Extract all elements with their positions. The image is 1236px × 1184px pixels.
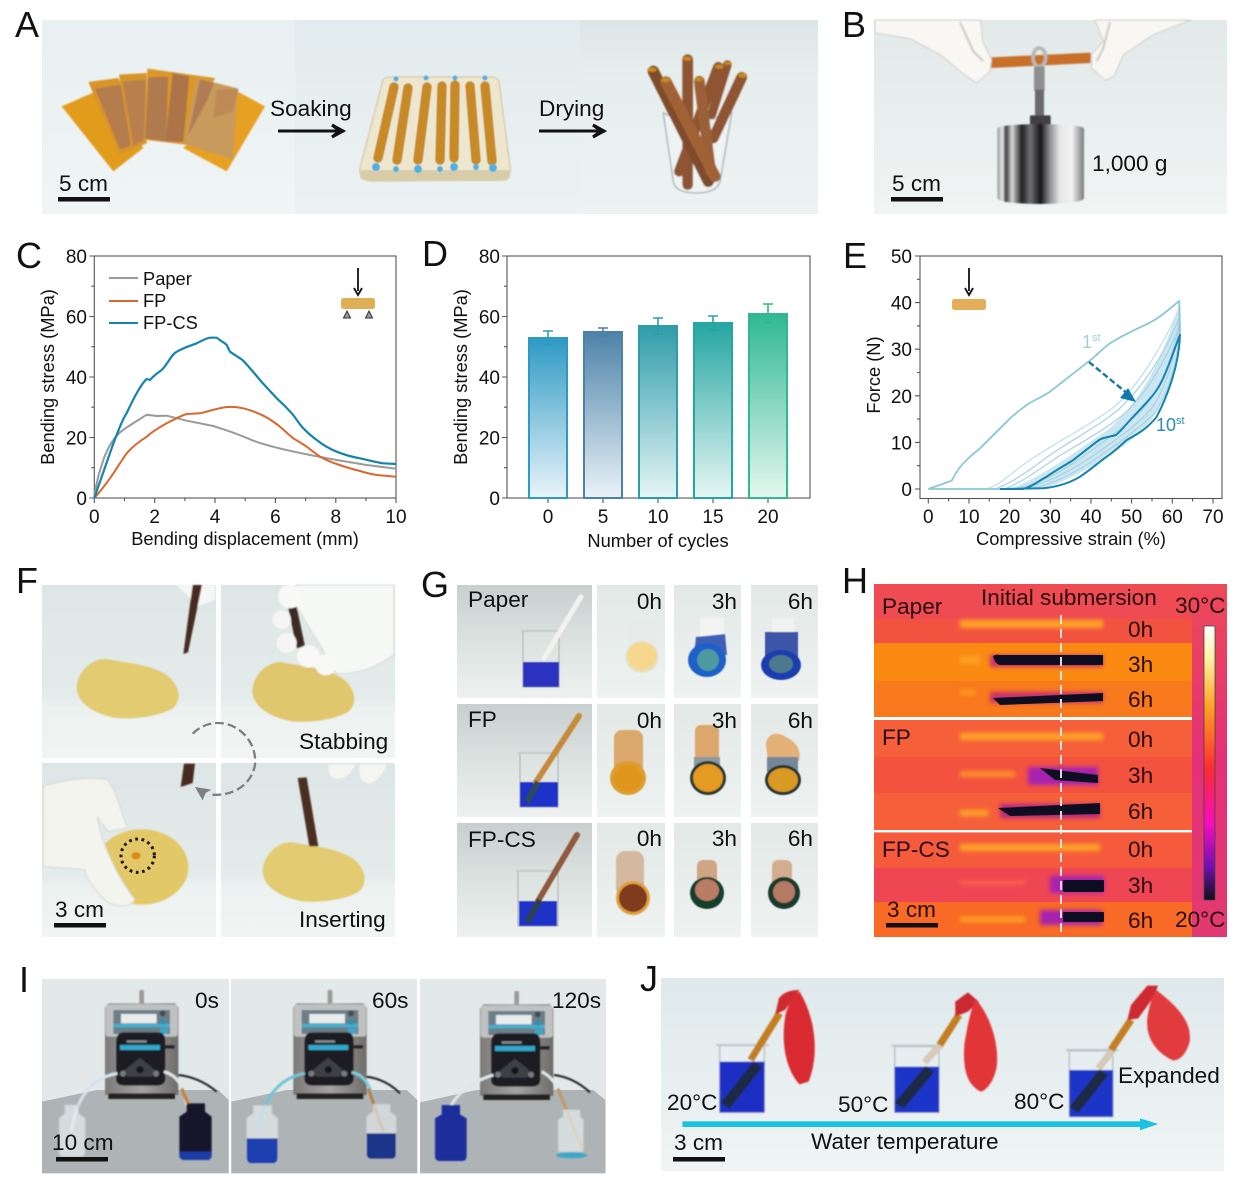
arrow: circular process [193, 723, 255, 800]
panel label E: E [843, 235, 867, 276]
x tick labels C: 6 [270, 507, 281, 528]
row labels G: FP-CS [468, 827, 536, 852]
x tick labels C [89, 507, 407, 528]
time labels G [637, 589, 813, 851]
x tick labels D [543, 507, 779, 528]
axis titles D: Bending stress (MPa) [450, 289, 471, 465]
y tick labels D: 80 [479, 247, 500, 268]
time labels G: 6h [788, 708, 813, 733]
axis titles D [450, 289, 729, 551]
y tick labels E: 40 [891, 294, 912, 315]
time labels H: 3h [1128, 763, 1153, 788]
chart C: bending stress vs displacement [37, 247, 407, 549]
heading: Initial submersion: Initial submersion [981, 585, 1157, 610]
x tick labels D: 5 [598, 507, 608, 528]
photo: soaking tray with tubes [360, 76, 510, 181]
axis titles E [863, 336, 1166, 549]
photo: pump 60s [247, 990, 400, 1163]
scale bar A: 5 cm [59, 171, 108, 196]
curve: cycle 10 [1000, 335, 1180, 489]
annotation: 10st: st [1176, 415, 1185, 427]
bars D [529, 314, 787, 498]
photo: FP-CS cross sections [616, 851, 800, 915]
photo: pump 120s [435, 991, 590, 1161]
y tick labels C: 60 [66, 308, 87, 328]
photo: fan of FP sheets [62, 69, 265, 171]
photo: beaker 50 C with balloon [891, 992, 997, 1112]
panel A: soaking and drying photos [42, 20, 818, 214]
time labels G: 0h [637, 708, 662, 733]
annotation: 10st: 10 [1156, 415, 1176, 435]
panel label C: C [16, 235, 42, 276]
panel H: thermal images [874, 584, 1227, 937]
x tick labels C: 2 [149, 507, 160, 528]
photo: beaker 20 C with balloon [716, 990, 815, 1112]
sample labels H: FP-CS [882, 837, 950, 862]
sample labels H: Paper [882, 594, 943, 619]
x tick labels E: 20 [999, 507, 1020, 528]
panel label H: H [842, 560, 868, 601]
x tick labels E: 50 [1121, 507, 1142, 528]
photo: bottom left potato with hole [43, 764, 195, 906]
x tick labels E: 0 [923, 507, 934, 528]
icon: dotted circle around hole [121, 839, 154, 872]
time labels G: 6h [788, 589, 813, 614]
time labels I: 120s [552, 988, 601, 1013]
x tick labels E [923, 507, 1224, 528]
time labels G: 3h [712, 826, 737, 851]
panel F: potato stabbing photos [42, 584, 395, 937]
chart E: cyclic compression [863, 247, 1224, 549]
photo: Paper in beaker [521, 595, 582, 687]
time labels G: 6h [788, 826, 813, 851]
time labels H: 6h [1128, 799, 1153, 824]
temperature labels: 50°C [838, 1092, 888, 1117]
time labels G: 0h [637, 589, 662, 614]
error bars D [543, 304, 773, 345]
y tick labels E [891, 247, 912, 501]
label: Stabbing: Stabbing [299, 729, 388, 754]
y tick labels D: 20 [479, 428, 500, 450]
intermediate cycles [985, 310, 1180, 489]
dashed line: initial submersion [1060, 615, 1062, 935]
time labels H: 3h [1128, 652, 1153, 677]
y tick labels C: 80 [66, 247, 87, 268]
curve: FP [94, 407, 396, 498]
scale labels: 20°C [1175, 907, 1225, 932]
arrow: cycle trend [1089, 362, 1136, 402]
photo: pump 0s [59, 990, 217, 1160]
panel label B: B [842, 4, 866, 45]
row labels G [468, 587, 536, 852]
scale bar B: 5 cm [892, 171, 941, 196]
dividers [874, 717, 1192, 720]
photo: gloved hands holding tube with weight [875, 20, 1191, 204]
annotation: 1st: 1 [1082, 332, 1092, 352]
legend C: FP-CS [143, 312, 198, 333]
curve: FP-CS [94, 338, 396, 498]
time labels H: 6h [1128, 908, 1153, 933]
y tick labels D: 0 [489, 489, 500, 510]
scale bar I: 10 cm [52, 1130, 114, 1155]
y tick labels D: 60 [479, 308, 500, 328]
scale bar F: 3 cm [55, 897, 104, 922]
y tick labels C: 20 [66, 428, 87, 450]
temperature labels: 80°C [1014, 1089, 1064, 1114]
photo: FP in beaker [518, 716, 579, 807]
label: Inserting: Inserting [299, 907, 386, 932]
label: Expanded: Expanded [1118, 1063, 1220, 1088]
photo: FP-CS in beaker [516, 835, 577, 926]
arrow: drying [539, 125, 604, 137]
x tick labels C: 8 [331, 507, 341, 528]
x tick labels E: 30 [1040, 507, 1061, 528]
scale labels: 30°C [1175, 593, 1225, 618]
color scale bar [1204, 626, 1215, 900]
time labels H: 0h [1128, 727, 1153, 752]
legend C: FP [143, 290, 166, 311]
panel B: 1000 g load photo [874, 20, 1227, 214]
sample labels H [882, 594, 950, 862]
y tick labels E: 10 [891, 433, 912, 454]
axis titles D: Number of cycles [587, 530, 729, 551]
arrow: water temperature [682, 1118, 1158, 1130]
x tick labels D: 15 [702, 507, 724, 528]
x tick labels E: 10 [958, 507, 980, 528]
panel G: dye absorption photos [457, 585, 818, 937]
time labels I: 60s [372, 988, 408, 1013]
y tick labels D [479, 247, 500, 510]
axis titles C: Bending displacement (mm) [131, 528, 359, 549]
y tick labels C: 40 [66, 368, 87, 389]
axis titles E: Compressive strain (%) [976, 528, 1166, 549]
panel J: balloon expansion photos [661, 978, 1224, 1171]
chart D: bending stress vs cycles [450, 247, 810, 551]
legend C [109, 268, 198, 333]
photo: Paper cross sections [626, 618, 801, 680]
y tick labels C: 0 [76, 489, 87, 510]
axis titles C [37, 289, 359, 549]
legend C: Paper [143, 268, 192, 289]
sample labels H: FP [882, 725, 911, 750]
axis titles E: Force (N) [863, 336, 884, 414]
label: 1,000 g: 1,000 g [1092, 151, 1167, 176]
scale labels [1175, 593, 1225, 932]
time labels G: 3h [712, 589, 737, 614]
cloth [42, 1090, 605, 1173]
time labels H: 6h [1128, 687, 1153, 712]
panel label I: I [19, 959, 29, 1000]
warm streaks [960, 620, 1103, 922]
temperature labels: 20°C [667, 1090, 717, 1115]
y tick labels E: 50 [891, 247, 912, 268]
y tick labels E: 20 [891, 387, 912, 408]
panel label G: G [421, 564, 449, 605]
scale bar H: 3 cm [887, 897, 936, 922]
cold absorption bars [993, 655, 1104, 922]
time labels G: 0h [637, 826, 662, 851]
row labels G: Paper [468, 587, 529, 612]
photo: bottom right potato with inserted stick [263, 765, 387, 902]
label: Water temperature: Water temperature [811, 1129, 999, 1154]
axis titles C: Bending stress (MPa) [37, 289, 58, 465]
time labels H [1128, 617, 1153, 933]
panel I: peristaltic pump photos [42, 979, 606, 1173]
curve: cycle 1 [928, 301, 1180, 489]
inset: three point bending icon [341, 268, 375, 318]
panel label F: F [16, 560, 38, 601]
hysteresis loop fill [1010, 300, 1180, 489]
y tick labels C [66, 247, 87, 510]
time labels I [195, 988, 601, 1013]
panel label J: J [640, 958, 658, 999]
x tick labels E: 60 [1162, 507, 1183, 528]
annotation: 1st: st [1092, 332, 1101, 344]
x tick labels E: 70 [1202, 507, 1224, 528]
arrow: soaking [278, 125, 343, 137]
photo: top right stabbing with gloved hand [252, 584, 394, 722]
x tick labels C: 4 [210, 507, 221, 528]
purple halos [990, 655, 1104, 925]
photo: top left potato and stick [77, 585, 215, 718]
scale bar J: 3 cm [674, 1130, 723, 1155]
curve: Paper [94, 415, 396, 498]
label: Soaking: Soaking [270, 96, 352, 121]
panel label D: D [422, 233, 448, 274]
label: Drying: Drying [539, 96, 604, 121]
x tick labels D: 10 [647, 507, 669, 528]
photo: beaker 80 C with expanded balloon [1066, 986, 1190, 1117]
photo: dried tubes in beaker [647, 57, 747, 193]
time labels H: 3h [1128, 873, 1153, 898]
y tick labels E: 0 [901, 480, 912, 501]
y tick labels D: 40 [479, 368, 500, 389]
x tick labels D: 20 [757, 507, 779, 528]
time labels I: 0s [195, 988, 219, 1013]
x tick labels C: 10 [385, 507, 407, 528]
time labels H: 0h [1128, 617, 1153, 642]
time labels G: 3h [712, 708, 737, 733]
panel label A: A [15, 4, 39, 45]
temperature labels [667, 1089, 1064, 1117]
x tick labels D: 0 [543, 507, 553, 528]
x tick labels E: 40 [1080, 507, 1102, 528]
x tick labels C: 0 [89, 507, 100, 528]
y tick labels E: 30 [891, 340, 912, 361]
row labels G: FP [468, 707, 497, 732]
inset: compression icon [952, 268, 986, 310]
photo: FP cross sections [610, 725, 801, 795]
time labels H: 0h [1128, 837, 1153, 862]
